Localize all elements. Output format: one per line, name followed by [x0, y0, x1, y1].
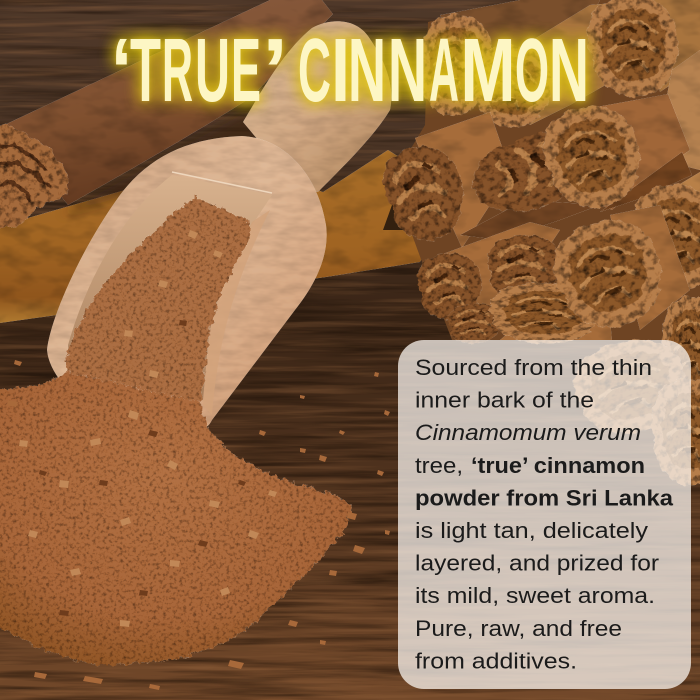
- title: ’: [262, 21, 283, 121]
- title: N: [348, 21, 386, 121]
- panel body text: [415, 355, 674, 673]
- stick end I: [414, 248, 488, 324]
- panel body text: inner bark of the: [415, 388, 594, 413]
- stick end B: [468, 40, 558, 133]
- flat cinnamon quill behind scoop: [0, 150, 432, 323]
- stick end D: [662, 50, 700, 170]
- scattered crumbs on table: [7, 360, 390, 690]
- panel body text: Cinnamomum verum: [415, 420, 641, 445]
- title: E: [231, 21, 261, 121]
- stick end K: [486, 232, 565, 302]
- right stick end behind panel: [652, 379, 700, 484]
- panel body text: Pure, raw, and free: [415, 616, 622, 641]
- stick end N: [662, 296, 700, 397]
- title: N: [549, 21, 589, 121]
- cinnamon stick top left: [0, 0, 333, 228]
- panel body text: tree,: [415, 453, 463, 478]
- stick end C: [582, 0, 685, 101]
- title: I: [331, 21, 350, 121]
- stick end G: [535, 96, 651, 217]
- text panel: [398, 340, 691, 689]
- inner wall shadow: [203, 210, 270, 415]
- title: ‘: [111, 21, 132, 121]
- wooden scoop: [47, 21, 391, 427]
- quill notch shadow: [383, 198, 425, 230]
- panel body text: its mild, sweet aroma.: [415, 583, 655, 608]
- title: N: [388, 21, 427, 121]
- middle row stick bodies: [415, 112, 510, 248]
- cinnamon powder pile: [0, 197, 390, 690]
- title: C: [298, 21, 331, 121]
- stick end M: [542, 206, 676, 341]
- bottom row stick bodies: [440, 205, 690, 340]
- panel body text: layered, and prized for: [415, 551, 659, 576]
- powder heap: [0, 372, 352, 665]
- lower stick ends behind panel: [566, 328, 696, 444]
- stick end J: [447, 301, 505, 345]
- cinnamon stack: [375, 0, 700, 484]
- panel body text: from additives.: [415, 648, 577, 673]
- title: R: [162, 21, 193, 121]
- scoop handle: [243, 21, 391, 192]
- panel body text: is light tan, delicately: [415, 518, 648, 543]
- dark powder flakes: [39, 320, 246, 616]
- stick body: [0, 0, 333, 205]
- title: O: [515, 21, 549, 121]
- panel body text: powder from Sri Lanka: [415, 485, 674, 510]
- title: [111, 21, 589, 121]
- title: T: [130, 21, 161, 121]
- back row lighter bodies: [500, 0, 700, 125]
- powder flakes: [19, 230, 277, 627]
- back row stick bodies: [440, 0, 600, 112]
- powder inside scoop: [66, 197, 250, 425]
- stick cut end: [0, 124, 68, 228]
- panel body text: Sourced from the thin: [415, 355, 652, 380]
- stick end A: [413, 10, 499, 119]
- stick end L: [490, 283, 601, 343]
- stack base shading: [392, 0, 700, 480]
- panel body text: ‘true’ cinnamon: [471, 453, 645, 478]
- scoop bowl: [47, 136, 327, 427]
- title: M: [460, 21, 516, 121]
- panel background: [398, 340, 691, 689]
- stick end F: [464, 123, 590, 227]
- scoop inner cavity: [68, 175, 272, 400]
- shadow under top left stick: [60, 110, 270, 215]
- title: A: [429, 21, 459, 121]
- title: U: [195, 21, 230, 121]
- stick end E: [375, 136, 476, 249]
- inner rim highlight: [172, 172, 272, 193]
- right stick H: [640, 172, 700, 210]
